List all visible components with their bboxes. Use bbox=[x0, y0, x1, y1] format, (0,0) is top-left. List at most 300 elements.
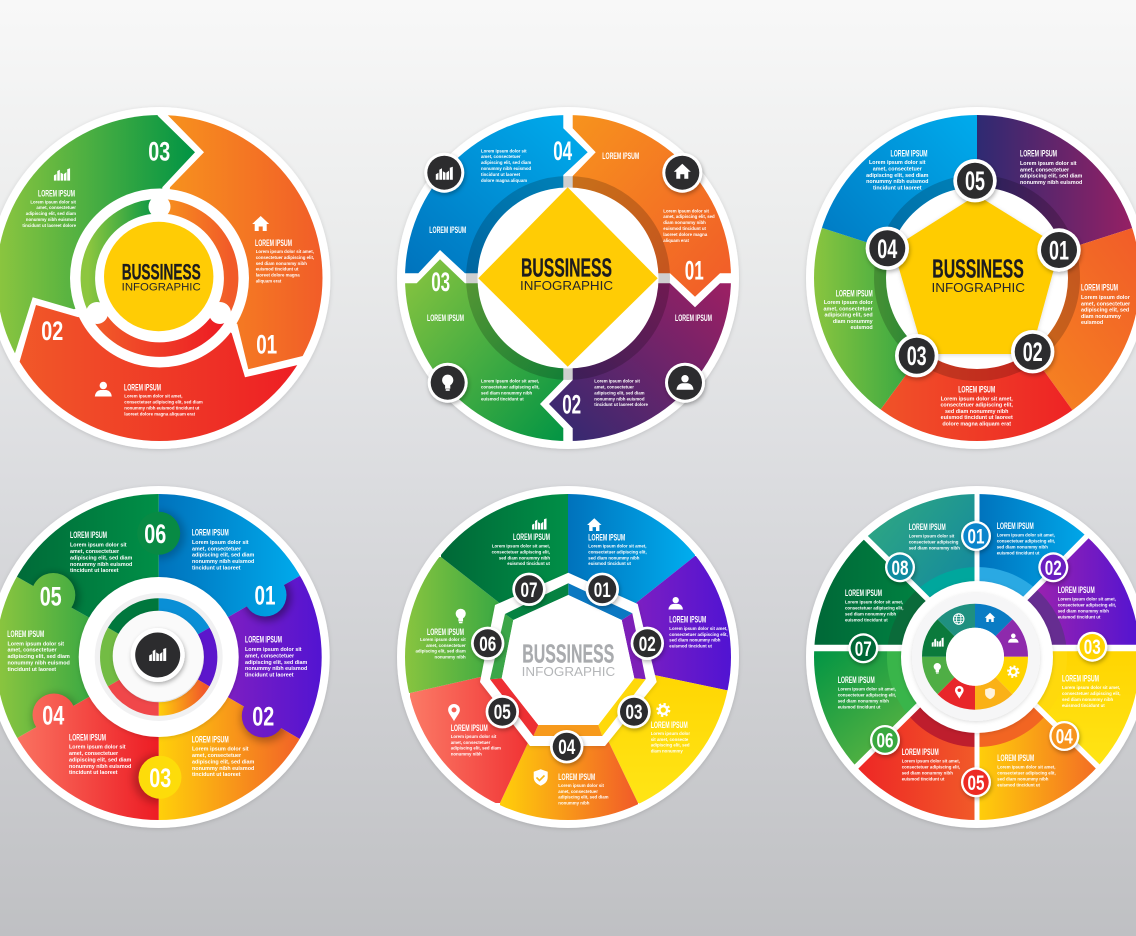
badge 02: 02 bbox=[639, 633, 656, 656]
section 03 green: nonummy nibh euismod bbox=[26, 217, 76, 222]
text block purple: amet, consectetuer bbox=[1020, 167, 1070, 173]
section 03 green bbox=[427, 267, 539, 401]
text block 07 bbox=[492, 518, 551, 566]
title bbox=[522, 639, 615, 679]
text block 03: euismod tincidunt ut bbox=[1062, 703, 1105, 708]
badge 01 bbox=[586, 573, 619, 606]
panel: four-arrow circle with diamond bbox=[397, 107, 739, 449]
text block 08: consectetuer adipiscing bbox=[909, 539, 959, 544]
section 01 orange bbox=[602, 151, 715, 286]
text block 06: Lorem ipsum dolor sit amet, bbox=[838, 687, 896, 692]
text block 04: nonummy nibh euismod bbox=[69, 764, 131, 770]
badge 01: 01 bbox=[968, 526, 985, 548]
section 04 blue: LOREM IPSUM bbox=[429, 225, 466, 235]
text block 04: amet, consectetuer bbox=[558, 789, 598, 794]
badge 03 bbox=[617, 695, 651, 728]
badge 08: 08 bbox=[892, 557, 909, 580]
title: BUSSINESS bbox=[522, 639, 614, 669]
text block 03: sed diam nonummy nibh bbox=[1062, 697, 1114, 702]
text block green bbox=[824, 288, 874, 331]
icon: home badge bbox=[662, 153, 702, 193]
number labels: 05 bbox=[40, 582, 62, 612]
section 01 orange: aliquam erat bbox=[663, 238, 689, 243]
text block blue: amet, consectetuer bbox=[873, 166, 923, 172]
icon: chart badge bbox=[424, 153, 464, 193]
badge 01: 01 bbox=[1049, 236, 1069, 266]
text block 06: adipiscing elit, sed diam bbox=[70, 555, 133, 561]
text block 04: adipiscing elit, sed diam bbox=[558, 795, 609, 800]
section 01 orange: 01 bbox=[685, 256, 704, 286]
inner arc bands bbox=[894, 574, 1060, 740]
yellow pentagon with title: BUSSINESS bbox=[932, 254, 1024, 284]
text block 04: nonummy nibh bbox=[558, 801, 590, 806]
section 02 red: laoreet dolore magna aliquam erat bbox=[124, 411, 196, 416]
section 03 green: LOREM IPSUM bbox=[427, 313, 464, 323]
text block red: dolore magna aliquam erat bbox=[942, 422, 1011, 428]
white dividers bbox=[808, 488, 1136, 826]
section 02 purple: nonummy nibh euismod bbox=[594, 396, 645, 401]
text block purple: LOREM IPSUM bbox=[1020, 148, 1057, 158]
text block 07: LOREM IPSUM bbox=[513, 532, 550, 542]
section 02 purple: LOREM IPSUM bbox=[675, 313, 712, 323]
badge 06 bbox=[471, 627, 504, 660]
text block 02: amet, consectetuer bbox=[245, 653, 295, 659]
number labels: 04 bbox=[42, 700, 64, 730]
segments bbox=[0, 480, 330, 830]
section 02 purple: Lorem ipsum dolor sit bbox=[594, 379, 640, 384]
text block 01: Lorem ipsum dolor sit amet, bbox=[588, 544, 646, 549]
section 01 orange: diam nonummy nibh bbox=[663, 220, 706, 225]
text block 02: LOREM IPSUM bbox=[1058, 585, 1095, 595]
text block 01: adipiscing elit, sed diam bbox=[192, 553, 255, 559]
text block blue: nonummy nibh euismod bbox=[866, 179, 928, 185]
text block 05: adipiscing elit, sed diam bbox=[8, 654, 70, 660]
text block 04: euismod tincidunt ut bbox=[997, 782, 1041, 787]
text block 06: adipiscing elit, sed diam bbox=[415, 649, 466, 654]
text block 03: amet, consectetuer bbox=[192, 753, 242, 759]
panel: seven-part circle with heptagon bbox=[397, 480, 739, 830]
text block 08: sed diam nonummy nibh bbox=[909, 545, 960, 550]
text block 01: amet, consectetuer bbox=[192, 546, 242, 552]
text block 05 bbox=[7, 629, 70, 673]
badge 05: 05 bbox=[968, 772, 985, 795]
section 03 green: Lorem ipsum dolor sit bbox=[30, 199, 77, 204]
section 03 green: amet, consectetuer bbox=[36, 205, 76, 210]
text block purple: adipiscing elit, sed diam bbox=[1020, 174, 1083, 180]
panel: eight-part circle bbox=[806, 480, 1136, 828]
text block 06: sed diam nonummy nibh bbox=[838, 699, 889, 704]
icon: chart centre bbox=[131, 628, 185, 682]
text block 08 bbox=[909, 522, 960, 550]
text block 03: adipiscing elit, sed bbox=[651, 743, 690, 748]
puzzle lobes bbox=[31, 512, 286, 799]
text block 06: Lorem ipsum dolor sit bbox=[420, 637, 466, 642]
centre disc bbox=[901, 581, 1053, 733]
text block 07: euismod tincidunt ut bbox=[507, 561, 551, 566]
section 04 blue: nonummy nibh euismod bbox=[481, 166, 532, 171]
text block 07: sed diam nonummy nibh bbox=[499, 555, 550, 560]
section 03 green: Lorem ipsum dolor sit amet, bbox=[481, 379, 539, 384]
text block 03: nonummy nibh euismod bbox=[192, 766, 254, 772]
text block 03: LOREM IPSUM bbox=[651, 720, 688, 730]
badge 07 bbox=[848, 633, 878, 663]
section 03 green: sed diam nonummy nibh bbox=[481, 390, 533, 395]
section 01 orange: laoreet dolore magna bbox=[256, 273, 300, 278]
text block 05: Lorem ipsum dolor sit bbox=[451, 734, 497, 739]
yellow diamond with title bbox=[478, 187, 658, 367]
text block 02: LOREM IPSUM bbox=[669, 614, 706, 624]
section 01 orange: Lorem ipsum dolor sit bbox=[663, 208, 709, 213]
text block 01: consectetuer adipiscing elit, bbox=[588, 549, 647, 554]
text block 04: consectetuer adipiscing elit, bbox=[997, 770, 1056, 775]
badge 06: 06 bbox=[479, 633, 496, 656]
text block 01 bbox=[587, 518, 647, 566]
section 01 orange: euismod tincidunt ut bbox=[256, 267, 299, 272]
segments bbox=[0, 100, 330, 450]
text block 05: LOREM IPSUM bbox=[451, 723, 488, 733]
text block 07: euismod tincidunt ut bbox=[845, 617, 888, 622]
text block 02: Lorem ipsum dolor sit bbox=[245, 647, 302, 653]
badge 06: 06 bbox=[876, 730, 894, 752]
badge 03 bbox=[895, 334, 938, 377]
text block 03: consectetuer adipiscing elit, bbox=[1062, 691, 1120, 696]
text block 05: nonummy nibh euismod bbox=[8, 660, 70, 666]
text block 04 bbox=[69, 732, 132, 776]
badge 02 bbox=[631, 627, 664, 660]
text block 03 bbox=[651, 704, 690, 754]
text block green: euismod bbox=[851, 325, 873, 331]
text block 05: Lorem ipsum dolor sit bbox=[8, 641, 64, 647]
text block orange: amet, consectetuer bbox=[1081, 301, 1131, 307]
section 03 green: euismod tincidunt ut bbox=[481, 396, 524, 401]
text block 03: Lorem ipsum dolor sit amet, bbox=[1062, 685, 1120, 690]
section 02 red: LOREM IPSUM bbox=[124, 382, 161, 392]
number labels: 03 bbox=[149, 763, 171, 793]
badge 07: 07 bbox=[855, 638, 872, 661]
segments bbox=[400, 480, 735, 830]
badge 04: 04 bbox=[877, 234, 897, 264]
text block 05: amet, consectetuer bbox=[451, 740, 491, 745]
heptagon band bbox=[480, 573, 657, 746]
centre rings bbox=[70, 188, 249, 368]
badge 07: 07 bbox=[520, 579, 538, 602]
badge 05 bbox=[953, 159, 997, 202]
section 02 purple: amet, consectetuer bbox=[594, 384, 634, 390]
segments bbox=[400, 110, 735, 447]
text block 03: LOREM IPSUM bbox=[1062, 674, 1099, 684]
text block 08: LOREM IPSUM bbox=[909, 522, 946, 532]
text block 05: consectetuer adipiscing elit, bbox=[902, 765, 960, 770]
badge 04: 04 bbox=[558, 736, 575, 759]
text block 06 bbox=[415, 609, 466, 660]
badge 05: 05 bbox=[965, 166, 985, 196]
text block 04: Lorem ipsum dolor sit amet, bbox=[997, 764, 1055, 769]
badge 02 bbox=[1038, 552, 1068, 582]
badge 01 bbox=[1037, 228, 1081, 272]
text block 07: consectetuer adipiscing elit, bbox=[492, 549, 550, 554]
badge 03: 03 bbox=[1084, 636, 1101, 659]
text block 01: nonummy nibh euismod bbox=[192, 559, 254, 565]
text block 02: Lorem ipsum dolor sit amet, bbox=[669, 626, 727, 631]
panel: three-arrow circle infographic bbox=[0, 100, 330, 450]
section 01 orange: consectetuer adipiscing elit, bbox=[256, 255, 314, 260]
segments bbox=[810, 100, 1136, 447]
text block 03: sit amet, consecte bbox=[651, 737, 689, 742]
dark ring and white disc bbox=[472, 182, 664, 374]
section 02 purple: 02 bbox=[562, 390, 581, 420]
text block 07: consectetuer adipiscing elit, bbox=[845, 605, 903, 610]
number labels: 06 bbox=[144, 519, 166, 549]
section 03 green: consectetuer adipiscing elit, bbox=[481, 384, 539, 390]
section 04 blue: tincidunt ut laoreet bbox=[481, 172, 521, 177]
text block 02 bbox=[245, 634, 308, 679]
centre rings bbox=[79, 577, 239, 737]
text block 01: sed diam nonummy nibh bbox=[997, 545, 1048, 550]
text block 03 bbox=[192, 734, 255, 778]
text block 02: adipiscing elit, sed diam bbox=[245, 660, 308, 666]
section 04 blue: 04 bbox=[553, 136, 572, 166]
text block 04: amet, consectetuer bbox=[69, 751, 119, 757]
badge 01 bbox=[961, 521, 991, 551]
text block 06 bbox=[70, 530, 133, 574]
section 01 orange: LOREM IPSUM bbox=[255, 238, 292, 248]
text block orange: adipiscing elit, sed bbox=[1081, 308, 1129, 314]
number labels: 01 bbox=[254, 580, 276, 610]
title: INFOGRAPHIC bbox=[522, 665, 615, 679]
text block 06: nonummy nibh euismod bbox=[70, 562, 132, 568]
text block blue: Lorem ipsum dolor sit bbox=[869, 160, 926, 166]
section 02 red: nonummy nibh euismod tincidunt ut bbox=[124, 405, 200, 410]
panel: six-part puzzle circle bbox=[0, 480, 330, 830]
text block 01: LOREM IPSUM bbox=[192, 528, 229, 538]
text block 06: euismod tincidunt ut bbox=[838, 705, 881, 710]
badge 02 bbox=[1011, 330, 1054, 373]
badge 04 bbox=[1049, 721, 1079, 751]
text block 02: consectetuer adipiscing elit, bbox=[669, 632, 728, 637]
section 02 purple: adipiscing elit, sed diam bbox=[594, 390, 645, 395]
text block orange: euismod bbox=[1081, 320, 1103, 326]
text block blue bbox=[866, 148, 929, 191]
text block 02: euismod tincidunt ut bbox=[1058, 614, 1101, 619]
text block blue: adipiscing elit, sed diam bbox=[866, 173, 929, 179]
text block blue: LOREM IPSUM bbox=[890, 148, 928, 158]
badge 02: 02 bbox=[1023, 337, 1043, 367]
yellow pentagon with title bbox=[893, 195, 1060, 354]
badge 04: 04 bbox=[1056, 726, 1073, 748]
text block green: Lorem ipsum dolor bbox=[824, 300, 874, 306]
badge 08 bbox=[885, 552, 915, 582]
number labels bbox=[40, 519, 275, 793]
text block 02: sed diam nonummy nibh bbox=[1058, 608, 1109, 613]
text block 02: Lorem ipsum dolor sit amet, bbox=[1058, 596, 1116, 601]
yellow centre with title: BUSSINESS bbox=[122, 259, 201, 284]
text block 04: LOREM IPSUM bbox=[69, 732, 106, 742]
text block 01: Lorem ipsum dolor sit amet, bbox=[997, 533, 1055, 538]
section 01 orange: 01 bbox=[256, 330, 277, 360]
badge 02: 02 bbox=[1045, 557, 1062, 580]
text block 03: Lorem ipsum dolor bbox=[651, 731, 690, 736]
text block 03: LOREM IPSUM bbox=[192, 734, 229, 744]
text block 03: diam nonummy bbox=[651, 749, 683, 754]
badge 01: 01 bbox=[594, 579, 611, 602]
text block 04: LOREM IPSUM bbox=[997, 753, 1034, 763]
section 02 red: Lorem ipsum dolor sit amet, bbox=[124, 394, 182, 399]
text block 05: Lorem ipsum dolor sit amet, bbox=[902, 759, 960, 764]
text block 04 bbox=[534, 769, 609, 806]
yellow centre with title: INFOGRAPHIC bbox=[122, 282, 201, 294]
text block purple: Lorem ipsum dolor sit bbox=[1020, 161, 1077, 167]
text block red: sed diam nonummy nibh bbox=[945, 409, 1008, 415]
text block 06: tincidunt ut laoreet bbox=[70, 568, 119, 574]
section 04 blue: dolore magna aliquam bbox=[481, 178, 527, 183]
text block 02: sed diam nonummy nibh bbox=[669, 638, 721, 643]
section 04 blue bbox=[429, 136, 572, 235]
text block 01: tincidunt ut laoreet bbox=[192, 566, 241, 572]
section 03 green: LOREM IPSUM bbox=[38, 188, 75, 198]
badge 07 bbox=[512, 573, 546, 606]
badge 04 bbox=[550, 730, 583, 763]
text block 06: Lorem ipsum dolor sit bbox=[70, 543, 127, 549]
text block 07: Lorem ipsum dolor sit amet, bbox=[845, 599, 903, 604]
section 04 blue: amet, consectetuer bbox=[481, 154, 521, 159]
badge 05 bbox=[486, 695, 519, 728]
text block 06: consectetuer adipiscing elit, bbox=[838, 693, 896, 698]
text block red: LOREM IPSUM bbox=[958, 384, 995, 394]
yellow centre with title bbox=[104, 222, 213, 331]
text block 05: nonummy nibh bbox=[451, 751, 482, 756]
text block 04 bbox=[997, 753, 1056, 787]
text block 02 bbox=[668, 597, 728, 648]
section 01 orange: amet, adipiscing elit, sed bbox=[663, 214, 715, 219]
badge 03: 03 bbox=[907, 341, 927, 371]
text block green: adipiscing elit, sed bbox=[824, 313, 873, 319]
text block 07: Lorem ipsum dolor sit amet, bbox=[492, 544, 550, 549]
section 01 orange: aliquam erat bbox=[256, 278, 282, 284]
text block 06: nonummy nibh bbox=[435, 655, 466, 660]
icon: person badge bbox=[665, 363, 705, 403]
text block 02: nonummy nibh euismod bbox=[245, 666, 307, 672]
badge 06 bbox=[870, 725, 900, 755]
text block 08: Lorem ipsum dolor sit bbox=[909, 533, 955, 538]
text block 07: sed diam nonummy nibh bbox=[845, 611, 897, 616]
text block 05: adipiscing elit, sed diam bbox=[451, 746, 501, 751]
text block 06: LOREM IPSUM bbox=[838, 675, 875, 685]
text block 04: sed diam nonummy nibh bbox=[997, 776, 1049, 781]
text block 01: euismod tincidunt ut bbox=[997, 551, 1040, 556]
text block 03 bbox=[1062, 674, 1120, 708]
section 01 orange: Lorem ipsum dolor sit amet, bbox=[256, 249, 314, 254]
text block red bbox=[940, 384, 1013, 428]
text block 01: LOREM IPSUM bbox=[997, 521, 1034, 531]
text block 02: LOREM IPSUM bbox=[245, 634, 282, 644]
section 03 green bbox=[22, 136, 170, 228]
text block 04: adipiscing elit, sed diam bbox=[69, 757, 132, 763]
text block purple: nonummy nibh euismod bbox=[1020, 180, 1082, 186]
section 03 green: 03 bbox=[431, 267, 450, 297]
text block 04: tincidunt ut laoreet bbox=[69, 770, 118, 776]
icon wheel bbox=[932, 613, 1019, 699]
text block 05: sed diam nonummy nibh bbox=[902, 771, 953, 776]
yellow diamond with title: BUSSINESS bbox=[521, 253, 612, 283]
text block 05: LOREM IPSUM bbox=[7, 629, 44, 639]
text block orange bbox=[1081, 282, 1131, 326]
text block 01: LOREM IPSUM bbox=[588, 532, 625, 542]
text block green: amet, consectetuer bbox=[824, 306, 874, 312]
number labels: 02 bbox=[252, 702, 274, 732]
text block 06: amet, consectetuer bbox=[70, 549, 120, 555]
text block blue: tincidunt ut laoreet bbox=[873, 185, 922, 191]
text block 04: Lorem ipsum dolor sit bbox=[558, 783, 604, 788]
text block 04: LOREM IPSUM bbox=[558, 772, 595, 782]
text block 01: Lorem ipsum dolor sit bbox=[192, 540, 249, 546]
text block 05: tincidunt ut laoreet bbox=[8, 667, 56, 673]
text block 02: euismod tincidunt ut bbox=[669, 643, 713, 648]
text block 01 bbox=[997, 521, 1055, 556]
text block 07: LOREM IPSUM bbox=[845, 588, 882, 598]
text block 01: consectetuer adipiscing elit, bbox=[997, 539, 1055, 544]
section 01 orange: LOREM IPSUM bbox=[602, 151, 639, 161]
text block green: diam nonummy bbox=[833, 319, 873, 325]
text block 05 bbox=[448, 704, 501, 756]
text block orange: Lorem ipsum dolor bbox=[1081, 295, 1131, 301]
text block green: LOREM IPSUM bbox=[836, 288, 873, 298]
yellow pentagon with title: INFOGRAPHIC bbox=[932, 281, 1025, 295]
text block red: euismod tincidunt ut laoreet bbox=[941, 415, 1013, 421]
section 01 orange: euismod tincidunt ut bbox=[663, 226, 707, 231]
badge 03 bbox=[1077, 632, 1107, 662]
text block orange: diam nonummy bbox=[1081, 314, 1121, 320]
text block 02: tincidunt ut laoreet bbox=[245, 673, 294, 679]
section 04 blue: adipiscing elit, sed diam bbox=[481, 160, 531, 165]
text block 02 bbox=[1058, 585, 1116, 619]
badge 04 bbox=[866, 227, 909, 270]
text block 02: consectetuer adipiscing elit, bbox=[1058, 602, 1116, 607]
text block 06: LOREM IPSUM bbox=[70, 530, 107, 540]
text block 01 bbox=[192, 528, 255, 572]
icon: bulb badge bbox=[428, 363, 468, 403]
section 02 red: consectetuer adipiscing elit, sed diam bbox=[124, 400, 203, 404]
text block red: consectetuer adipiscing elit, bbox=[940, 403, 1013, 409]
text block 06 bbox=[838, 675, 896, 710]
text block 05 bbox=[902, 747, 960, 782]
text block 03: adipiscing elit, sed diam bbox=[192, 759, 255, 765]
section 02 red bbox=[41, 316, 203, 416]
panel: five-part circle with pentagon bbox=[806, 100, 1136, 449]
badge 03: 03 bbox=[626, 701, 642, 724]
text block 05: euismod tincidunt ut bbox=[902, 777, 945, 782]
section 03 green: 03 bbox=[148, 136, 170, 166]
text block 06: amet, consectetuer bbox=[426, 643, 466, 648]
section 04 blue: Lorem ipsum dolor sit bbox=[481, 148, 527, 153]
text block 04: Lorem ipsum dolor sit bbox=[69, 745, 126, 751]
text block purple bbox=[1020, 148, 1083, 186]
text block red: Lorem ipsum dolor sit amet, bbox=[941, 396, 1013, 402]
section 02 purple: tincidunt ut laoreet dolore bbox=[594, 402, 648, 407]
text block 03: Lorem ipsum dolor sit bbox=[192, 747, 249, 753]
badge 05 bbox=[961, 767, 991, 797]
text block 05: LOREM IPSUM bbox=[902, 747, 939, 757]
segments bbox=[814, 480, 1136, 825]
text block 05: amet, consectetuer bbox=[8, 648, 58, 654]
section 01 orange: sed diam nonummy nibh bbox=[256, 261, 307, 266]
dark ring and white disc bbox=[880, 181, 1074, 375]
section 02 red: 02 bbox=[41, 316, 63, 346]
section 02 purple bbox=[562, 313, 712, 420]
yellow diamond with title: INFOGRAPHIC bbox=[520, 279, 613, 293]
section 01 orange bbox=[252, 216, 314, 360]
section 03 green: tincidunt ut laoreet dolore bbox=[22, 223, 77, 228]
text block 03: tincidunt ut laoreet bbox=[192, 772, 241, 778]
